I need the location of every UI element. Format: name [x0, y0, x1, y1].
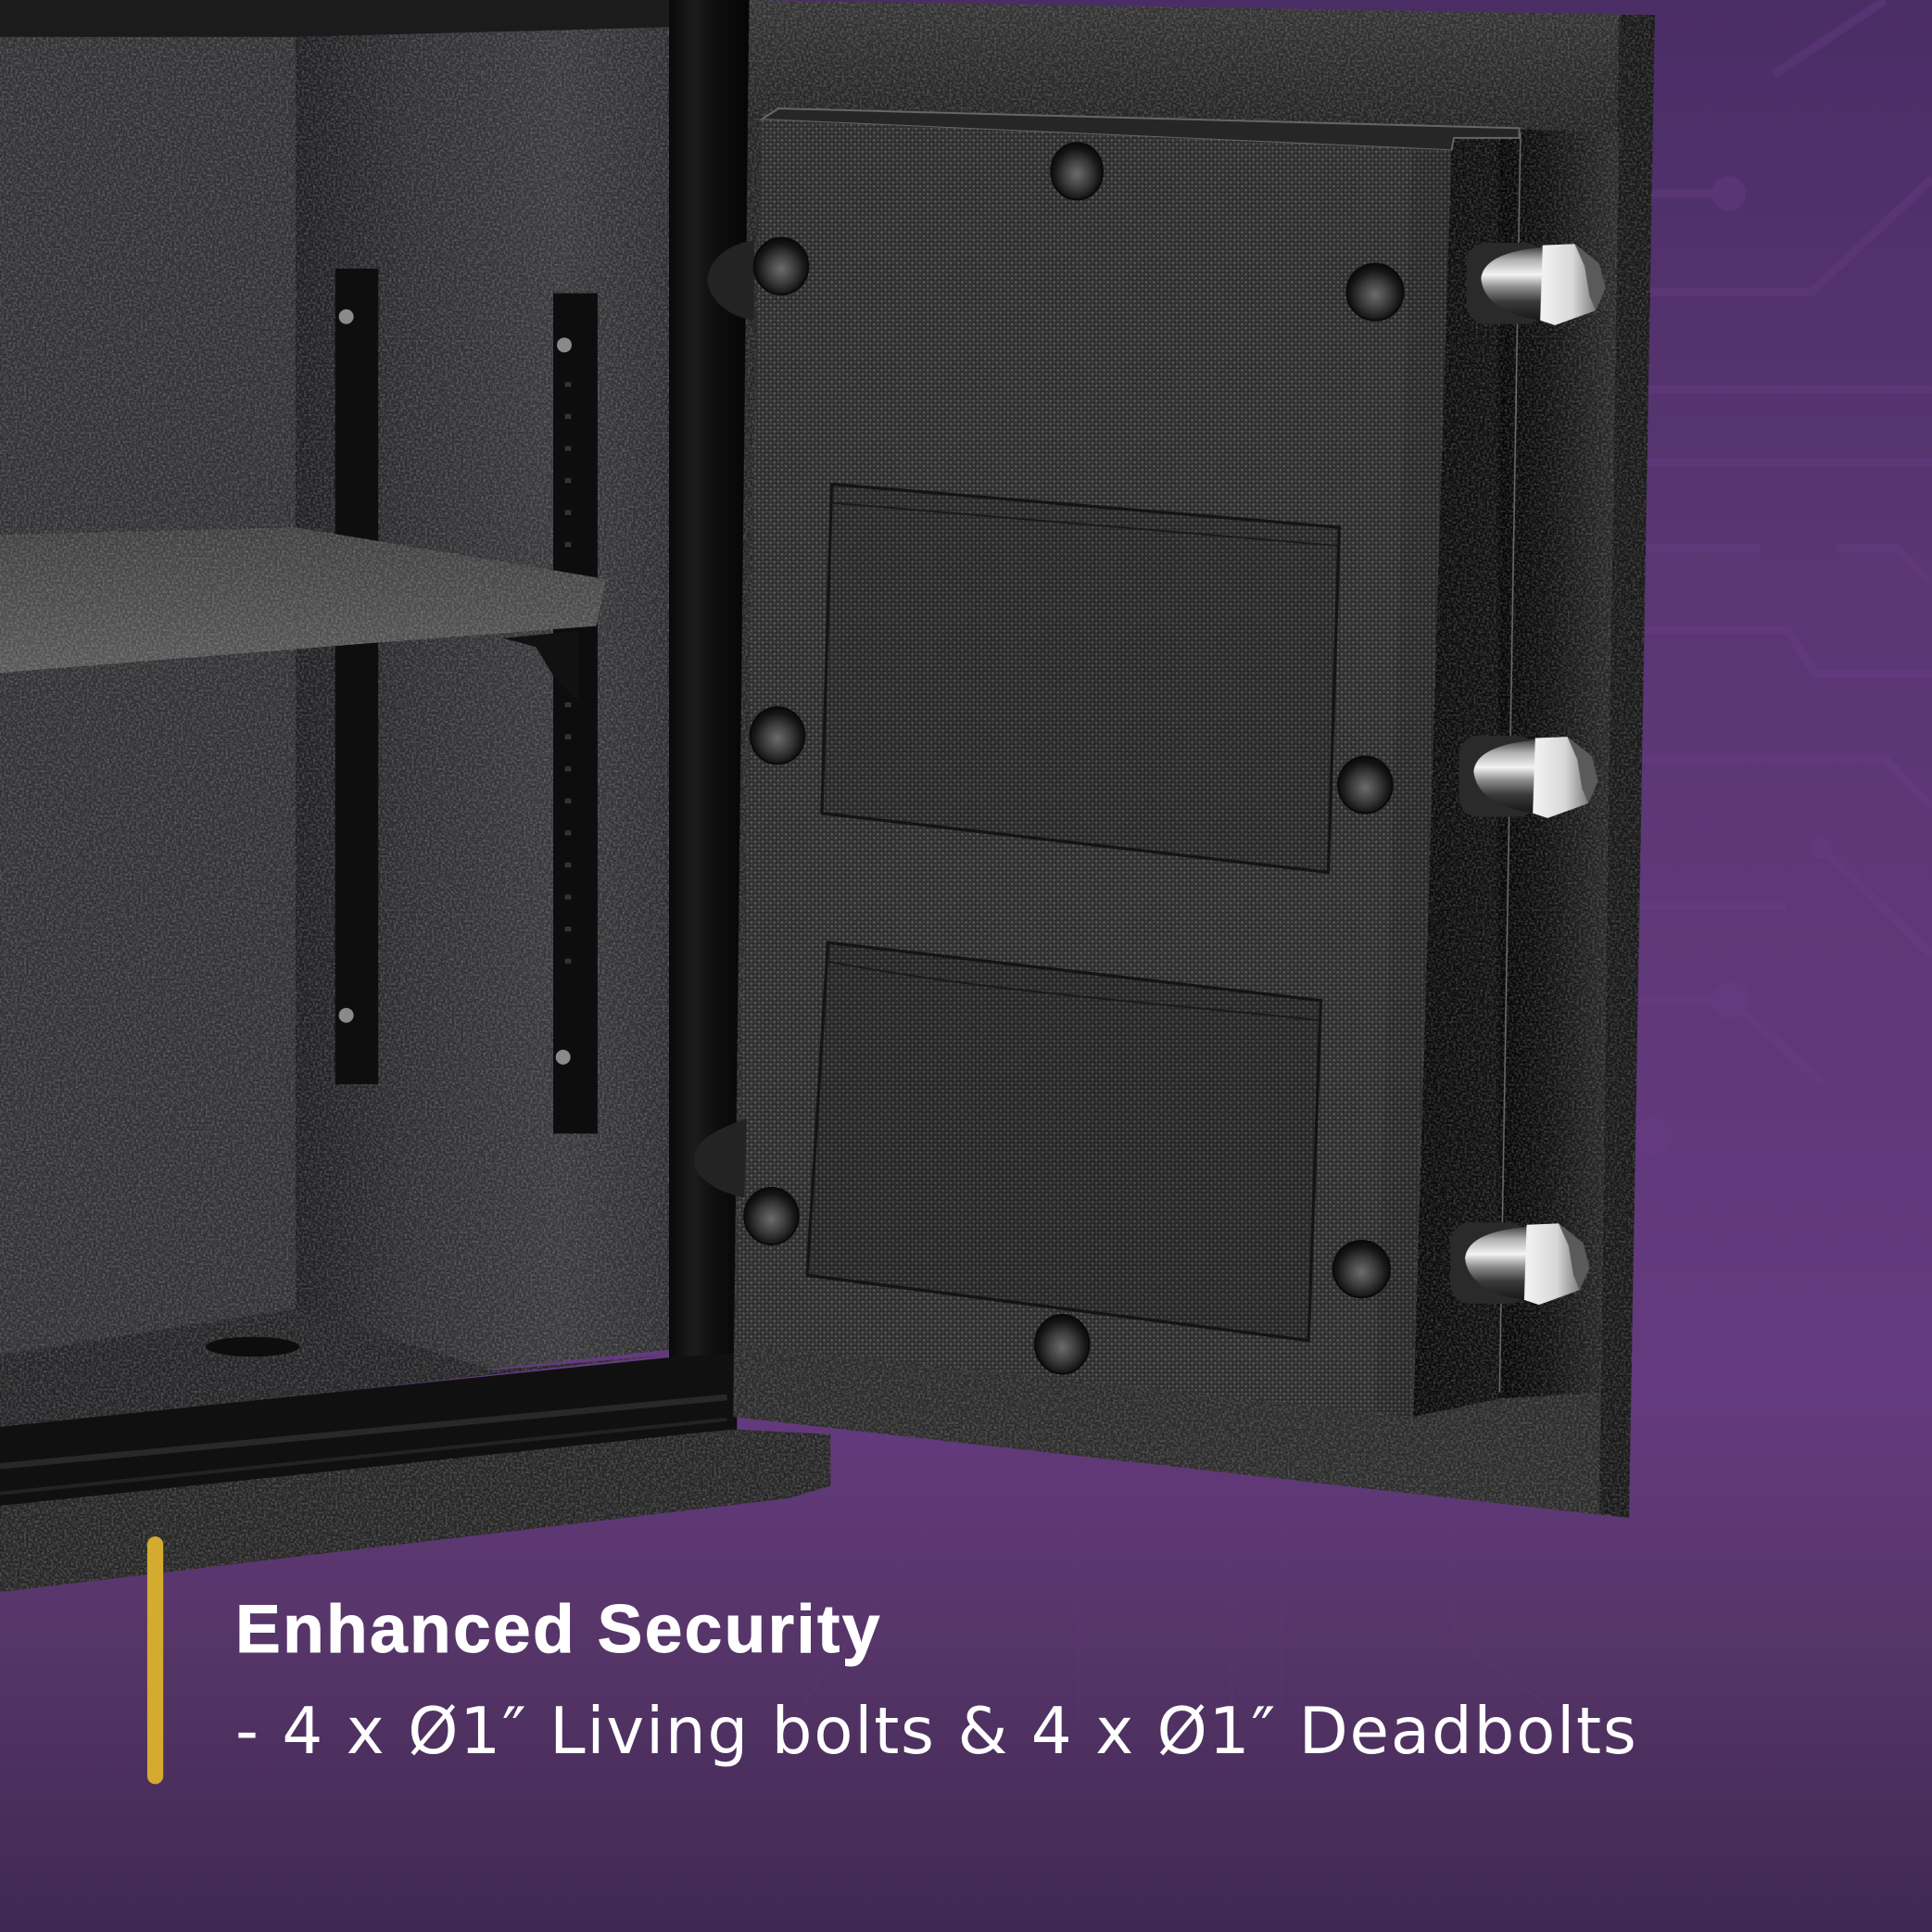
door frame bottom [0, 1353, 737, 1509]
door right edge band [1599, 15, 1655, 1518]
upper mesh pocket [822, 485, 1339, 872]
carpeted shelf [0, 527, 606, 673]
fabric panel [736, 120, 1451, 1417]
left shelf rail [335, 269, 378, 1084]
back wall felt [0, 34, 302, 1427]
lower mesh pocket [807, 942, 1320, 1341]
chrome bolt top [1466, 243, 1606, 325]
gold accent bar [147, 1536, 163, 1784]
interior floor [0, 1308, 665, 1429]
bolts description: - 4 x Ø1″ Living bolts & 4 x Ø1″ Deadbolts [235, 1695, 1636, 1769]
hinge bump upper [707, 240, 754, 321]
chrome bolt middle [1458, 736, 1598, 818]
circuit board line pattern [789, 0, 1932, 1749]
shelf bracket [503, 631, 579, 702]
channel seam line [1499, 133, 1521, 1393]
door frame vertical [669, 0, 751, 1429]
open safe door [694, 0, 1655, 1518]
fabric panel right bevel [1375, 150, 1451, 1417]
door right channel [1413, 130, 1619, 1417]
rivets [744, 143, 1404, 1374]
top strip [0, 0, 702, 37]
lower safe body [0, 1429, 830, 1592]
heading: Enhanced Security [235, 1592, 880, 1667]
chrome bolt bottom [1450, 1222, 1589, 1305]
floor hole [206, 1337, 299, 1357]
door outer panel [733, 0, 1655, 1518]
safe interior and body [0, 0, 830, 1592]
side wall felt [296, 25, 676, 1370]
hinge bump lower [694, 1118, 747, 1197]
top stepped edge [762, 108, 1520, 150]
right shelf rail [553, 293, 598, 1133]
